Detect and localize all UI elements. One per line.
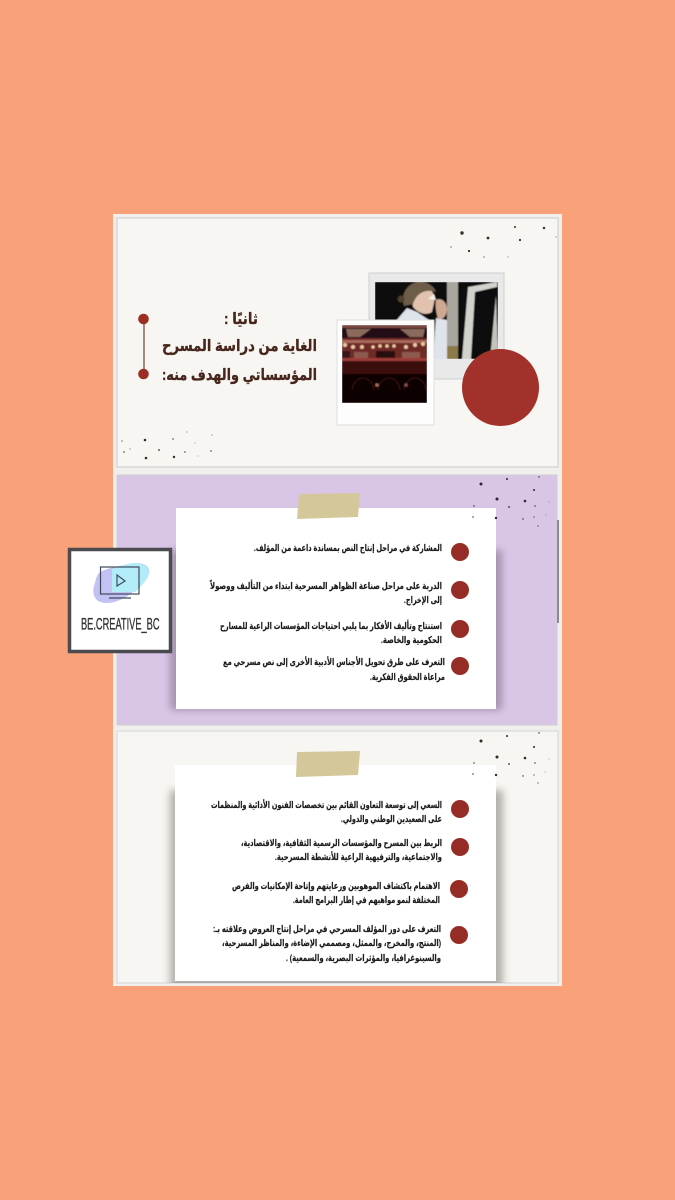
icon: video screen <box>93 563 149 603</box>
bullet 4: (المنتج، والمخرج، والممثل، ومصممي الإضاءة، والمناظر المسرحية، <box>222 937 441 949</box>
bullet 4 <box>223 656 469 683</box>
bullet 4: مراعاة الحقوق الفكرية. <box>370 671 445 683</box>
photo: theatre interior <box>337 320 434 425</box>
bullet 2 <box>241 837 469 863</box>
speckles <box>472 732 549 784</box>
bullet 1: السعي إلى توسعة التعاون القائم بين تخصصات الفنون الأدائية والمنظمات <box>211 799 442 811</box>
panel: title slide <box>117 218 558 467</box>
bullet 2: الربط بين المسرح والمؤسسات الرسمية الثقافية، والاقتصادية، <box>241 837 442 849</box>
speckles bottom left <box>121 432 212 459</box>
panel: beige slide <box>117 731 558 990</box>
paper shadow <box>170 550 502 710</box>
bullet 4: التعرف على طرق تحويل الأجناس الأدبية الأخرى إلى نص مسرحي مع <box>223 656 445 668</box>
bullet 2 <box>210 579 469 606</box>
bullet 3: المختلفة لنمو مواهبهم في إطار البرامج العامة. <box>293 894 440 906</box>
bullet 3: استنتاج وتأليف الأفكار بما يلبي احتياجات المؤسسات الراعية للمسارح <box>220 619 442 632</box>
title: الغاية من دراسة المسرح <box>162 338 317 355</box>
paper sheet <box>176 508 496 709</box>
bullet 1: المشاركة في مراحل إنتاج النص بمساندة داعمة من المؤلف. <box>254 542 442 554</box>
bullet 4: التعرف على دور المؤلف المسرحي في مراحل إنتاج العروض وعلاقته بـ: <box>213 923 441 935</box>
paper sheet <box>175 765 496 981</box>
bullet 4 <box>213 923 468 964</box>
bullet 1 <box>254 542 469 561</box>
title: المؤسساتي والهدف منه: <box>162 367 317 385</box>
tape <box>296 751 360 777</box>
slide strip backing <box>113 214 562 986</box>
bullet 2: إلى الإخراج. <box>404 594 442 606</box>
speckles <box>472 476 549 527</box>
speckles top right <box>450 226 556 258</box>
bullet 1: على الصعيدين الوطني والدولي. <box>341 813 442 825</box>
bullet 2: الدربة على مراحل صناعة الظواهر المسرحية ابتداء من التأليف ووصولاً <box>210 579 442 592</box>
logo text: BE.CREATIVE_BC <box>81 614 160 634</box>
bullet 3 <box>220 619 469 646</box>
bullet 3: الحكومية والخاصة. <box>381 634 442 646</box>
paper shadow <box>170 790 503 990</box>
bullet 3 <box>232 880 468 906</box>
bullet 4: والسينوغرافيا، والمؤثرات البصرية، والسمعية) . <box>286 952 441 964</box>
title: ثانيًا : <box>224 311 258 328</box>
title <box>162 311 317 385</box>
panel: purple slide <box>117 475 559 725</box>
red circle <box>462 349 539 426</box>
logo badge <box>70 550 170 652</box>
bullet 2: والاجتماعية، والترفيهية الراعية للأنشطة المسرحية. <box>275 851 442 863</box>
bullet 3: الاهتمام باكتشاف الموهوبين ورعايتهم وإتاحة الإمكانيات والفرص <box>232 880 440 892</box>
tape <box>297 493 360 519</box>
timeline marker <box>138 314 149 379</box>
bullet 1 <box>211 799 469 825</box>
photo: man at window <box>369 273 504 379</box>
